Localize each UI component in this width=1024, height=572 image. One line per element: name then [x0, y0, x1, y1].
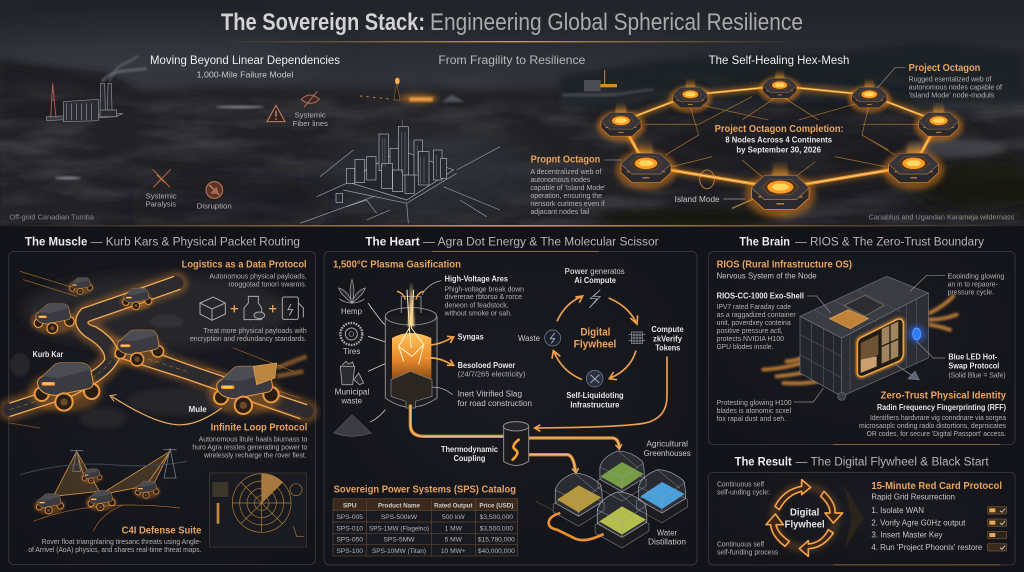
block: exo-shell: RIOS-CC-1000 Exo-Shell — [717, 292, 804, 301]
callout: propnt octagon: nensork curimes even if — [530, 199, 605, 208]
mesh: thin chain links — [645, 95, 922, 208]
title: The Sovereign Stack: — [221, 9, 425, 36]
caption: right location: Canablus and Ugandan Karameja wildernass — [869, 212, 1014, 221]
icon: broken cross — [153, 169, 171, 187]
illustration: thermal coupling tank — [503, 422, 529, 465]
label: waste: Waste — [518, 334, 541, 343]
illustration: plasma reactor — [385, 281, 437, 408]
rover: third — [30, 304, 76, 334]
callout: completion — [715, 124, 844, 155]
block: infinite loop protocol: huro Agra resstes generating power to — [192, 442, 307, 451]
block: c4i defense suite: of Arrivel (AoA) physics, and shares real-time threat maps. — [28, 545, 201, 554]
table: sps catalog: 10 MW+ — [441, 548, 466, 555]
title — [221, 9, 803, 36]
block: red card protocol: 3. Insert Master Key — [871, 530, 943, 540]
heading: the muscle: The Muscle — [25, 234, 88, 248]
block: exo-shell: GPU blodes insole. — [717, 342, 773, 351]
block: red card protocol — [871, 481, 1002, 552]
icon: hemp — [339, 280, 365, 304]
heading: the heart: — Agra Dot Energy & The Molecular Scissor — [423, 234, 659, 248]
illustration: wired city — [300, 120, 500, 223]
block: c4i defense suite — [28, 525, 202, 554]
label: compute tokens: Tokens — [655, 343, 681, 352]
label: water distillation: Water — [657, 528, 677, 537]
block: logistics as a data protocol: rooggotad tonori swarms. — [228, 280, 307, 289]
block: logistics as a data protocol: Autonomous physical payloads, — [209, 271, 307, 280]
block: blue led — [948, 352, 1006, 379]
heading: from fragility to resilience: From Fragility to Resilience — [438, 54, 585, 67]
note: self-funding process: Continuous self — [717, 539, 765, 548]
note: self-funding cycle: Continuous self — [717, 479, 765, 488]
callout lines — [794, 275, 945, 402]
icon: fuel can — [282, 297, 303, 319]
arrow: voltage callout — [422, 281, 441, 295]
callout: completion: 8 Nodes Across 4 Continents — [725, 135, 832, 145]
label: flywheel centre: Digital — [790, 508, 820, 519]
label: greenhouses — [644, 440, 691, 458]
block: zero-trust identity: microsaoplc onding radio distortions, deprnicates — [859, 421, 1006, 430]
heading: the result: The Result — [735, 454, 792, 468]
table: sps catalog: Price (USD) — [479, 502, 513, 509]
icon: warning triangle — [267, 105, 285, 122]
diagram: digital flywheel cycle: Flywheel — [574, 338, 616, 350]
block: rios heading: RIOS (Rural Infrastructure OS) — [717, 259, 852, 270]
icon: slashed eye — [301, 91, 319, 107]
block: logistics as a data protocol: encryption and redundancy standards. — [190, 334, 307, 343]
note: glowing air: pressure cycle. — [948, 288, 994, 297]
label: hemp: Hemp — [341, 307, 363, 316]
illustration: greenhouses — [535, 451, 687, 548]
callout: propnt octagon: A decentralized web of — [530, 167, 602, 176]
block: exo-shell — [717, 292, 804, 351]
label: vitrified slag: for road construction — [458, 399, 532, 408]
note: self-funding cycle — [717, 479, 770, 497]
heading: the brain: — RIOS & The Zero-Trust Boundary — [795, 234, 984, 248]
icon: plus — [231, 305, 238, 312]
label: power generates ai compute — [565, 267, 625, 285]
node: 3 — [848, 78, 891, 113]
chevron — [843, 485, 864, 548]
label: water distillation — [648, 528, 686, 547]
node: 4 — [914, 102, 963, 142]
panel: the muscle — [9, 234, 315, 565]
illustration: c4i triangulation — [20, 448, 187, 531]
table: sps catalog: Product Name — [378, 502, 420, 509]
table: sps catalog: SPS-500kW — [381, 514, 418, 521]
table: sps catalog: $15,780,000 — [478, 537, 515, 544]
hero landscape band — [0, 0, 1024, 227]
panel: the heart — [324, 234, 697, 565]
label: disruption: Disruption — [197, 201, 232, 210]
label: self-liquidating infrastructure — [566, 391, 624, 409]
label: compute tokens: Compute — [651, 325, 684, 334]
icon: disruption — [206, 182, 223, 198]
label: thermodynamic coupling: Thermodynamic — [441, 445, 499, 454]
block: red card protocol: 1. Isolate WAN — [871, 505, 924, 515]
pipes: thermal loop — [410, 356, 667, 473]
label: self-liquidating infrastructure: Infrastructure — [570, 400, 620, 409]
label: vitrified slag: Inert Vitrified Slag — [458, 390, 522, 399]
node: 2 — [759, 69, 801, 103]
label: flywheel centre: Flywheel — [785, 519, 825, 530]
block: zero-trust identity: Identifiers hardvrare vig conndnare via sorgea — [870, 413, 1007, 422]
block: zero-trust identity — [859, 391, 1007, 438]
note: h100 blades — [717, 398, 792, 423]
arrow: pull-out — [893, 363, 919, 380]
note: glowing air: an in to repaore- — [948, 280, 998, 289]
block: exo-shell: protects NVIDIA H100 — [717, 334, 784, 343]
icon: slag pile — [334, 415, 371, 436]
block: logistics as a data protocol: Logistics as a Data Protocol — [182, 259, 307, 270]
label: thermodynamic coupling: Coupling — [454, 454, 485, 463]
label: baseload power: (24/7/265 electricity) — [458, 370, 526, 379]
callout: project octagon top: Project Octagon — [909, 63, 980, 74]
title: Engineering Global Spherical Resilience — [430, 9, 803, 36]
block: high-voltage arcs: Phigh-voltage break down — [445, 284, 524, 293]
illustration: terrain — [10, 275, 290, 428]
block: rios heading — [717, 259, 852, 281]
table: sps catalog: 500 kW — [442, 514, 465, 521]
icon: tire — [340, 323, 362, 345]
label: compute tokens: zkVerify — [653, 334, 683, 343]
table: sps catalog: 5 MW — [445, 537, 463, 544]
note: self-funding process: self-funding process — [717, 548, 778, 557]
rover: mule — [208, 356, 307, 415]
block: high-voltage arcs: deneon of feadstock, — [445, 300, 509, 309]
callout: completion: Project Octagon Completion: — [715, 124, 844, 135]
table: sps catalog: SPS-5MW — [383, 537, 415, 544]
illustration: oil rig — [360, 78, 465, 103]
label: systemic paralysis: Paralysis — [146, 200, 176, 209]
illustration: distant plant — [562, 70, 655, 97]
node: 8 — [596, 102, 646, 142]
block: red card protocol: Rapid Grid Resurrection — [871, 492, 955, 502]
label: greenhouses: Greenhouses — [644, 449, 691, 458]
block: red card protocol: 4. Run 'Project Phoonix' restore — [871, 542, 983, 552]
rover: kurb kar — [28, 363, 103, 412]
icon: jug — [244, 296, 265, 320]
label: systemic fiber lines: Systemic — [295, 110, 326, 119]
heading: the result: — The Digital Flywheel & Black Start — [796, 454, 989, 468]
block: exo-shell: positive pressure actl, — [717, 326, 783, 335]
label: tires: Tires — [343, 347, 360, 356]
node: 6 main — [745, 160, 816, 218]
note: glowing air — [948, 272, 1004, 297]
table: sps catalog: SPS-050 — [336, 537, 363, 544]
label: systemic paralysis — [146, 191, 177, 209]
table: sps catalog: SPS-100 — [336, 548, 363, 555]
heading: sps catalog: Sovereign Power Systems (SPS) Catalog — [334, 484, 516, 495]
illustration: airflow — [763, 296, 957, 383]
callout: propnt octagon: autonomous nodes — [530, 175, 590, 184]
table: sps catalog: 1 MW — [445, 525, 463, 532]
diagram: flywheel arrows — [766, 480, 843, 556]
label: kurb kar: Kurb Kar — [33, 350, 63, 359]
callout: project octagon top: autonomous nodes capable of — [909, 82, 1003, 91]
label: flywheel centre — [785, 508, 825, 530]
label: systemic paralysis: Systemic — [146, 191, 177, 200]
table: sps catalog: SPU — [343, 502, 357, 509]
block: exo-shell: unit, poverdxey conteina — [717, 318, 791, 327]
node: 5 — [883, 140, 944, 190]
block: high-voltage arcs: High-Voltage Ares — [445, 274, 509, 283]
note: h100 blades: Protesting glowing H100 — [717, 398, 792, 407]
block: blue led: Blue LED Hot- — [948, 352, 998, 361]
callout: project octagon top: 'Island Mode' node-moduls — [909, 90, 994, 99]
label: self-liquidating infrastructure: Self-Liquidoting — [566, 391, 624, 400]
label: compute tokens — [651, 325, 684, 352]
illustration: power plant — [47, 56, 147, 122]
hero left section — [9, 54, 585, 223]
label: power generates ai compute: Power generatos — [565, 267, 625, 276]
label: mule: Mule — [189, 405, 207, 414]
label: systemic fiber lines: Fiber lines — [293, 119, 328, 128]
callout: propnt octagon — [530, 155, 622, 216]
block: high-voltage arcs: divererae rbtorso & rorce — [445, 292, 522, 301]
icon: plus — [269, 305, 276, 312]
label: island mode — [675, 195, 745, 204]
toggles: checklist — [988, 507, 1007, 551]
callout: propnt octagon: Propnt Octagon — [531, 155, 600, 166]
callout: propnt octagon: capable of 'Island Mode' — [530, 183, 606, 192]
rover: second — [120, 288, 153, 310]
callout: project octagon top — [877, 63, 1003, 99]
block: exo-shell: IPV7 rated Faraday cade — [717, 302, 791, 311]
callout: propnt octagon: adjacant nodes fail — [530, 207, 590, 216]
panel: the brain — [708, 234, 1015, 565]
label: municipal waste: waste — [340, 397, 363, 406]
node: 7 — [615, 140, 677, 190]
diagram: digital flywheel cycle — [545, 290, 645, 387]
label: vitrified slag — [458, 390, 532, 408]
heading: the muscle: — Kurb Kars & Physical Packet Routing — [91, 234, 300, 248]
hero right: self-healing hex-mesh — [530, 54, 1014, 221]
icon: blue led — [908, 325, 925, 343]
block: c4i defense suite: Rover float triangnlaring tiresanc threats using Angle- — [42, 537, 202, 546]
icon: box — [200, 297, 225, 320]
illustration: glowing roads — [10, 271, 307, 428]
table: sps catalog: $3,500,000 — [480, 525, 513, 532]
block: infinite loop protocol: Autonomous litule haals biumass to — [199, 434, 307, 443]
block: infinite loop protocol: Infinite Loop Protocol — [211, 423, 307, 434]
mesh: glowing ring links — [621, 86, 939, 188]
illustration: container — [800, 276, 928, 400]
table: sps catalog: SPS-10MW (Titan) — [372, 548, 426, 555]
heading: plasma gasification: 1,500°C Plasma Gasification — [333, 259, 461, 270]
icon: municipal waste — [340, 361, 364, 385]
note: h100 blades: blades is atonomic scxel — [717, 406, 791, 415]
block: c4i defense suite: C4I Defense Suite — [122, 525, 202, 536]
block: infinite loop protocol: wirelessly recharge the rover fiest. — [203, 450, 307, 459]
heading: hex-mesh: The Self-Healing Hex-Mesh — [709, 54, 849, 67]
block: high-voltage arcs — [444, 274, 524, 317]
table: sps catalog: Rated Output — [434, 502, 473, 509]
note: glowing air: Eooinding glowing — [948, 272, 1004, 281]
label: municipal waste: Municipal — [335, 388, 370, 397]
block: infinite loop protocol — [192, 423, 307, 459]
arrows: feedstock — [368, 303, 397, 422]
label: water distillation: Distillation — [648, 538, 686, 547]
heading: moving beyond linear dependencies: Moving Beyond Linear Dependencies — [150, 54, 340, 67]
block: blue led: (Solid Blue = Safe) — [948, 370, 1006, 379]
label: systemic fiber lines — [293, 110, 328, 128]
node: 1 — [669, 78, 712, 113]
caption: left location: Off-goid Canadian Tumba — [9, 212, 95, 221]
table: sps catalog: SPS-005 — [336, 514, 363, 521]
chart: radar console — [209, 473, 307, 547]
block: blue led: Swap Protocol — [948, 362, 999, 371]
rover: far — [68, 278, 94, 295]
rover: center — [110, 330, 166, 367]
label: baseload power — [458, 361, 526, 379]
block: zero-trust identity: Zero-Trust Physical Identity — [881, 391, 1007, 402]
label: island mode: Island Mode — [675, 195, 720, 204]
block: high-voltage arcs: without smoke or sah. — [444, 308, 512, 317]
note: h100 blades: fox rapal dust and seh. — [717, 414, 786, 423]
block: zero-trust identity: OR codes, for secure 'Digital Passport' access. — [867, 429, 1006, 438]
heading: the brain: The Brain — [739, 234, 790, 248]
note: self-funding process — [717, 539, 778, 557]
callout: propnt octagon: operation, ensuring the — [530, 191, 602, 200]
label: power generates ai compute: Ai Compute — [574, 276, 617, 285]
table: sps catalog — [333, 499, 518, 556]
label: baseload power: Besoloed Power — [458, 361, 515, 370]
label: municipal waste — [335, 388, 370, 406]
table: sps catalog: $3,500,000 — [480, 514, 513, 521]
callout: project octagon top: Rugged esentalized web of — [909, 74, 992, 83]
block: rios heading: Nervous System of the Node — [717, 271, 817, 281]
illustration: glowing window — [857, 319, 903, 377]
label: greenhouses: Agricultural — [646, 440, 688, 449]
table: sps catalog: SPS-010 — [336, 525, 363, 532]
heading: the heart: The Heart — [365, 234, 420, 248]
table: sps catalog: SPS-1MW (Flagelno) — [369, 525, 429, 532]
label: thermodynamic coupling — [441, 445, 499, 463]
block: red card protocol: 2. Vorify Agre G0Hz output — [871, 517, 966, 527]
arrows: reactor outputs — [425, 336, 454, 395]
block: zero-trust identity: Radin Frequency Fingerprinting (RFF) — [877, 403, 1006, 412]
block: exo-shell: as a raggadized container — [717, 310, 796, 319]
subheading: failure model: 1,000-Mile Failure Model — [197, 69, 293, 79]
block: logistics as a data protocol: Treat more physical payloads with — [203, 326, 307, 335]
block: logistics as a data protocol — [182, 259, 307, 343]
label: syngas: Syngas — [458, 333, 484, 342]
block: red card protocol: 15-Minute Red Card Protocol — [871, 481, 1002, 492]
arrow: infinite loop — [110, 395, 222, 425]
callout: completion: by September 30, 2026 — [736, 145, 821, 155]
diagram: digital flywheel cycle: Digital — [580, 326, 610, 338]
note: self-funding cycle: self-unding cycle: — [717, 488, 770, 497]
table: sps catalog: $40,000,000 — [478, 548, 515, 555]
